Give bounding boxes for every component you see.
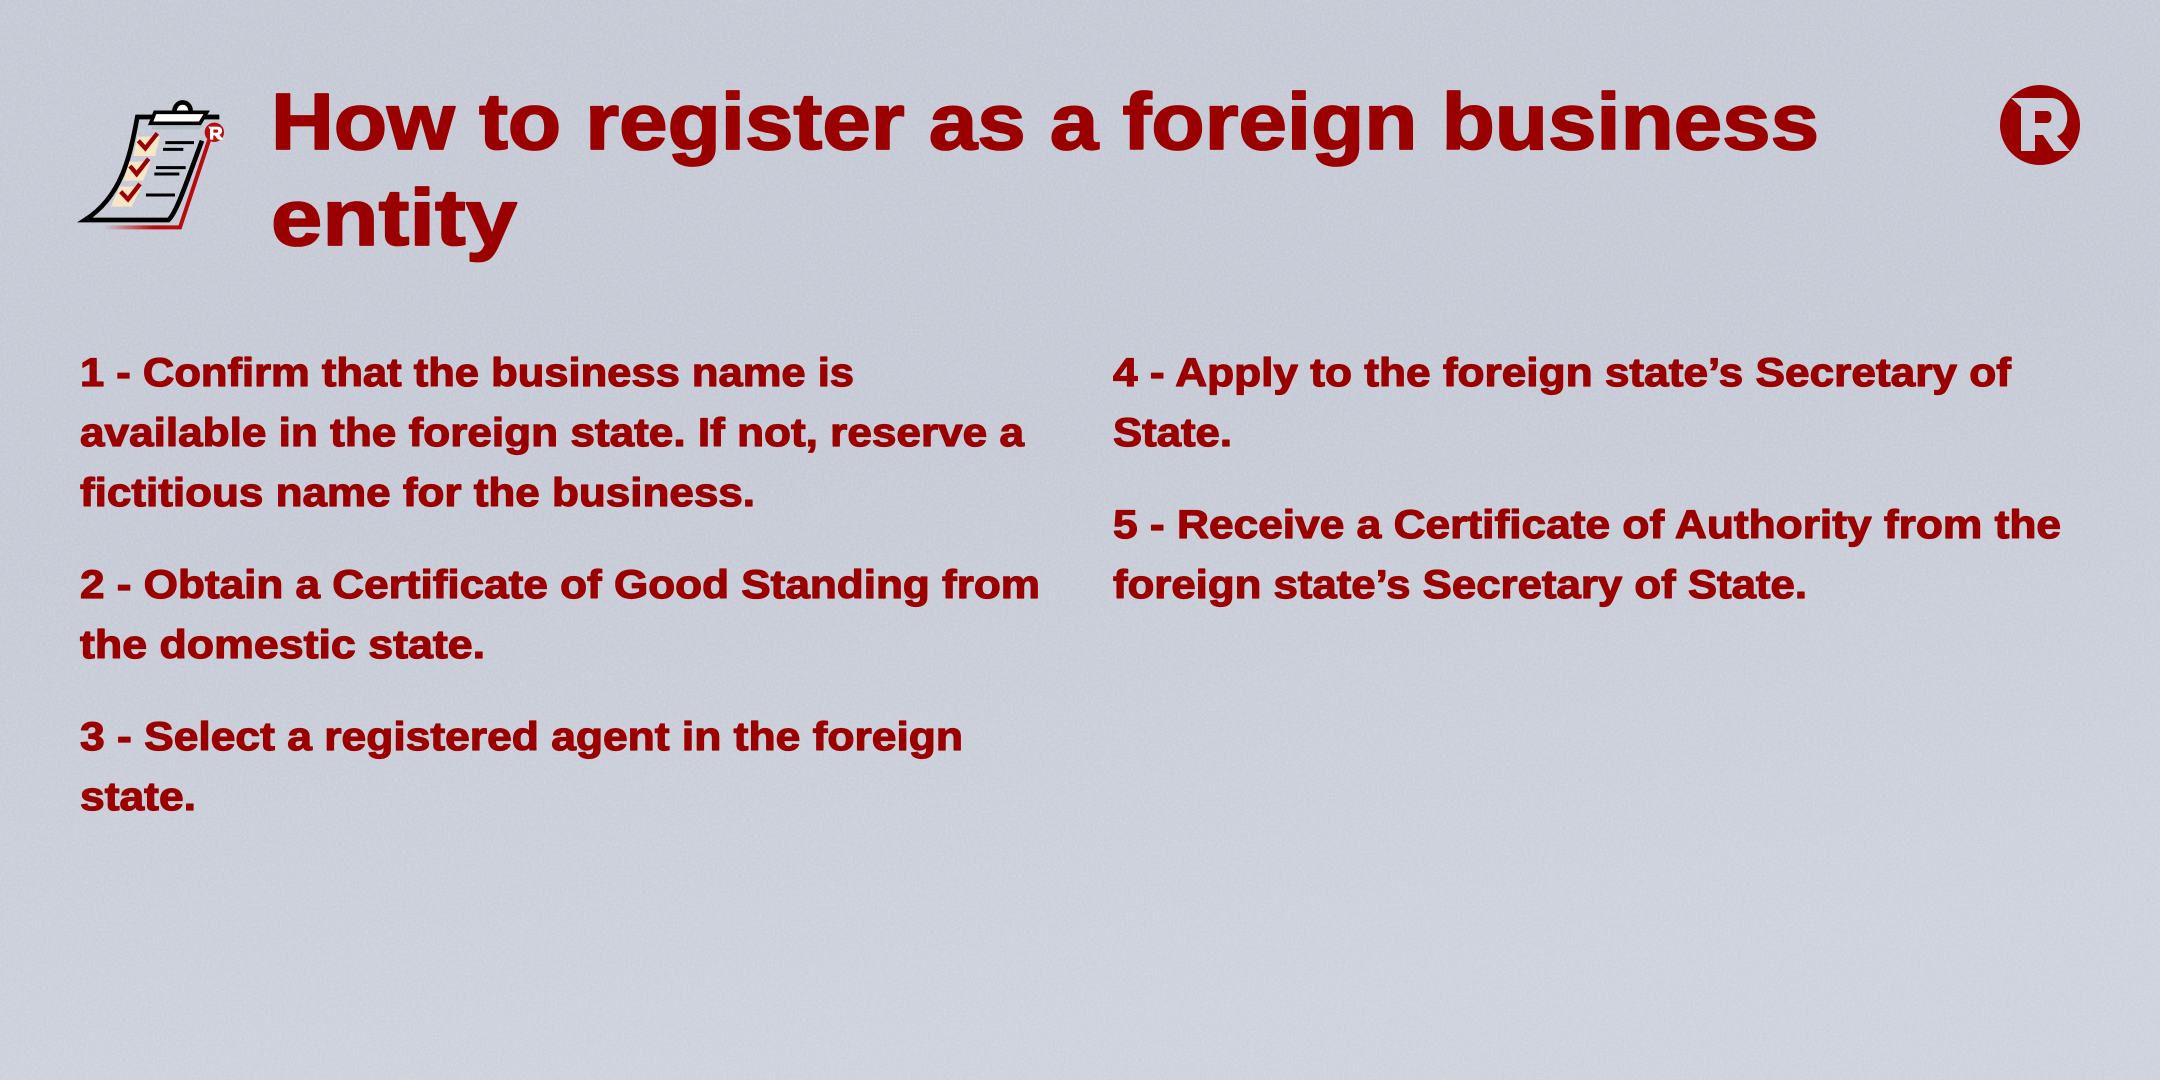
step 5: 5 - Receive a Certificate of Authority from the	[1113, 503, 2061, 547]
title: entity	[271, 173, 518, 262]
step 2: the domestic state.	[80, 623, 485, 667]
step 3	[80, 715, 963, 819]
step 5: foreign state’s Secretary of State.	[1113, 563, 1807, 607]
icon: brand logo	[2000, 85, 2080, 165]
text block: steps 1 to 3	[80, 351, 1040, 819]
step 4: State.	[1113, 411, 1232, 455]
step 1	[80, 351, 1025, 515]
step 3: 3 - Select a registered agent in the foreign	[80, 715, 963, 759]
icon: checklist clipboard	[85, 102, 224, 227]
title	[271, 77, 1819, 262]
step 1: available in the foreign state. If not, reserve a	[80, 411, 1025, 455]
step 2	[80, 563, 1040, 667]
step 1: fictitious name for the business.	[80, 471, 755, 515]
title: How to register as a foreign business	[271, 77, 1819, 166]
step 2: 2 - Obtain a Certificate of Good Standing from	[80, 563, 1040, 607]
step 5	[1113, 503, 2061, 607]
step 4	[1113, 351, 2012, 455]
step 1: 1 - Confirm that the business name is	[80, 351, 854, 395]
step 4: 4 - Apply to the foreign state’s Secretary of	[1113, 351, 2012, 395]
text block: steps 4 and 5	[1113, 351, 2061, 607]
step 3: state.	[80, 775, 196, 819]
